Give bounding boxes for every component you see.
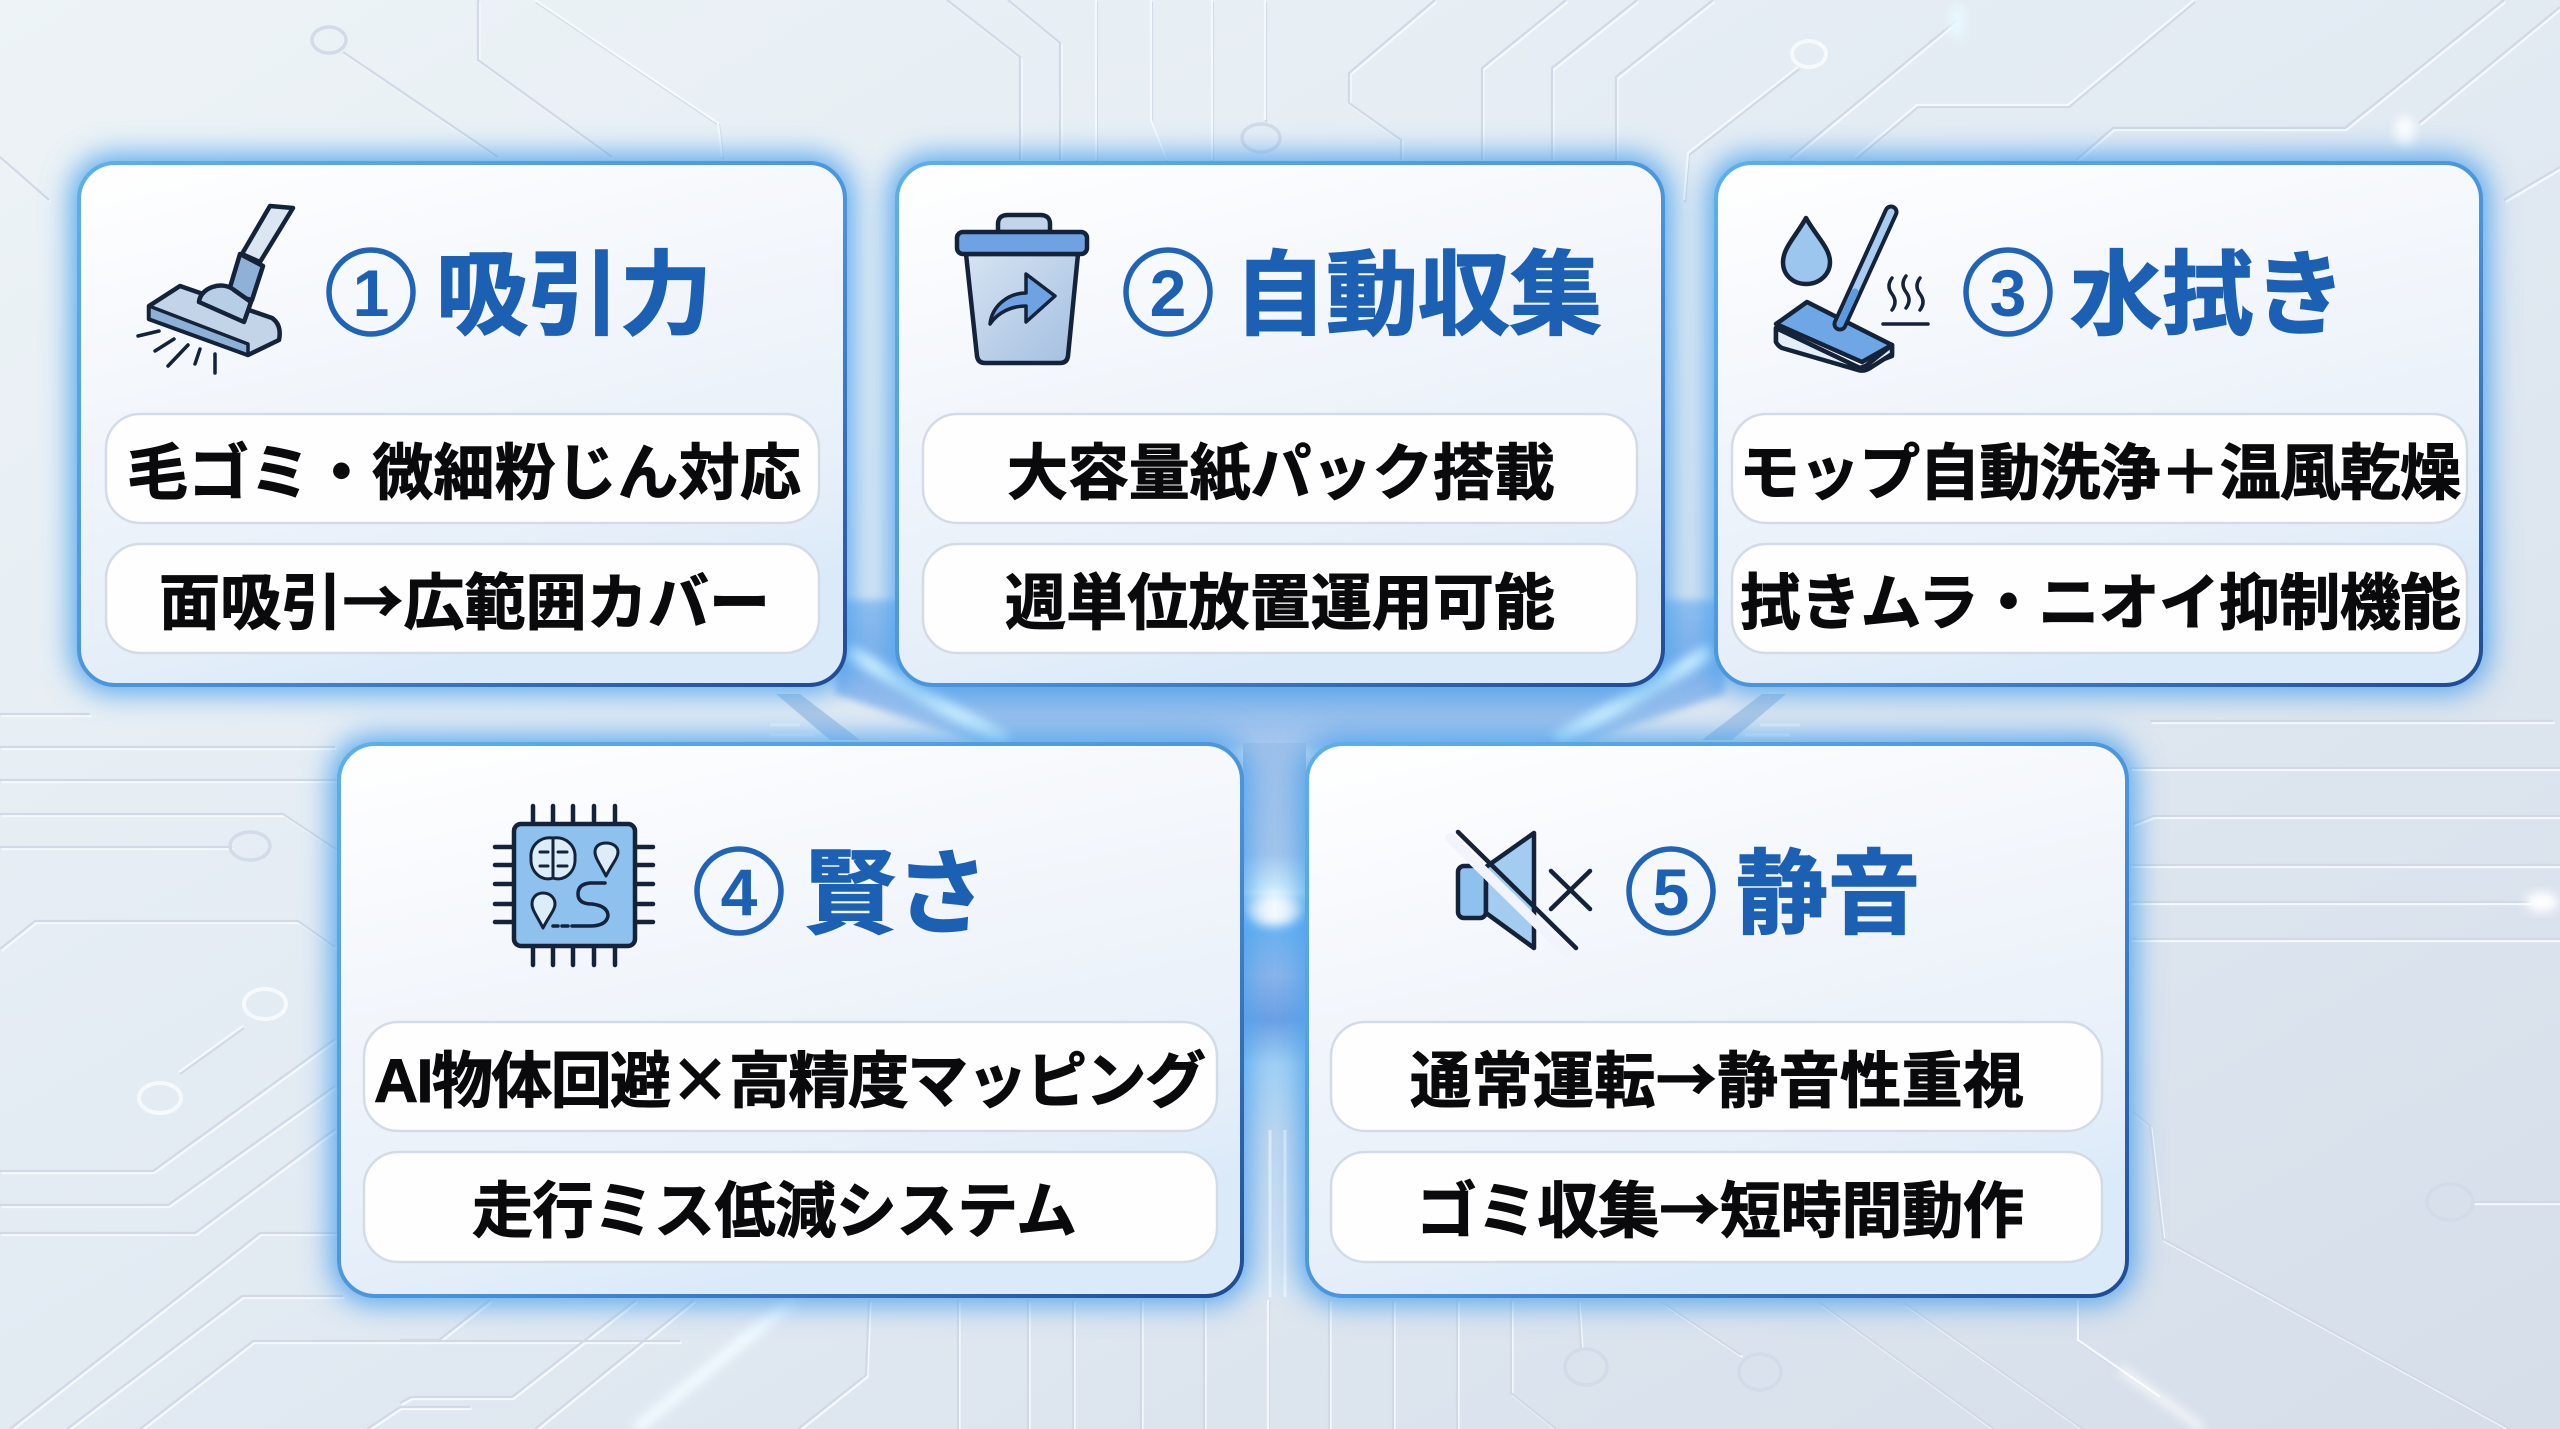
text: モップ自動洗浄＋温風乾燥 xyxy=(1732,414,2467,523)
text: 走行ミス低減システム: 走行ミス低減システム xyxy=(472,1177,1077,1245)
text: 大容量紙パック搭載 xyxy=(923,414,1637,523)
icon: vacuum head xyxy=(138,206,293,373)
heading: ④ 賢さ xyxy=(697,844,988,946)
text: モップ自動洗浄＋温風乾燥: モップ自動洗浄＋温風乾燥 xyxy=(1739,439,2461,507)
text: ゴミ収集→短時間動作 xyxy=(1331,1152,2102,1262)
heading: ④ 賢さ: 賢さ xyxy=(804,844,988,946)
text: 毛ゴミ・微細粉じん対応 xyxy=(106,414,819,523)
text: 拭きムラ・ニオイ抑制機能: 拭きムラ・ニオイ抑制機能 xyxy=(1740,569,2461,637)
panel: 賢さ xyxy=(332,737,1249,1303)
heading: ② 自動収集: 2 xyxy=(1150,256,1186,330)
heading: ⑤ 静音: 5 xyxy=(1653,855,1689,929)
icon: mop with drop and steam xyxy=(1776,212,1928,371)
icon: muted speaker xyxy=(1450,832,1590,954)
text: 通常運転→静音性重視 xyxy=(1331,1022,2102,1131)
text: 通常運転→静音性重視: 通常運転→静音性重視 xyxy=(1410,1031,2024,1120)
text: 週単位放置運用可能: 週単位放置運用可能 xyxy=(1005,569,1555,637)
panel: 自動収集 xyxy=(890,156,1670,692)
text: 面吸引→広範囲カバー xyxy=(106,544,819,653)
heading: ③ 水拭き: 水拭き xyxy=(2070,245,2346,347)
panel: 静音 xyxy=(1300,737,2134,1303)
heading: ① 吸引力: 1 xyxy=(353,256,389,330)
heading: ③ 水拭き: 3 xyxy=(1990,256,2026,330)
heading: ⑤ 静音 xyxy=(1629,844,1920,946)
panel: 吸引力 xyxy=(72,156,852,692)
heading: ⑤ 静音: 静音 xyxy=(1736,844,1920,946)
text: 面吸引→広範囲カバー: 面吸引→広範囲カバー xyxy=(159,553,770,642)
heading: ① 吸引力: 吸引力 xyxy=(436,245,712,347)
text: AI物体回避×高精度マッピング: AI物体回避×高精度マッピング xyxy=(374,1031,1206,1120)
icon: AI chip with map xyxy=(495,806,653,965)
heading: ④ 賢さ: 4 xyxy=(721,855,758,929)
text: 走行ミス低減システム xyxy=(364,1152,1217,1262)
icon: trash bin with arrow xyxy=(957,215,1087,363)
text: 週単位放置運用可能 xyxy=(923,544,1637,653)
text: 拭きムラ・ニオイ抑制機能 xyxy=(1732,544,2467,653)
central glowing chip connector xyxy=(770,600,1800,1297)
heading: ② 自動収集: 自動収集 xyxy=(1234,245,1602,347)
text: ゴミ収集→短時間動作: ゴミ収集→短時間動作 xyxy=(1416,1161,2024,1250)
text: 大容量紙パック搭載: 大容量紙パック搭載 xyxy=(1007,439,1555,507)
text: 毛ゴミ・微細粉じん対応: 毛ゴミ・微細粉じん対応 xyxy=(127,439,801,507)
panel: 水拭き xyxy=(1709,156,2488,692)
